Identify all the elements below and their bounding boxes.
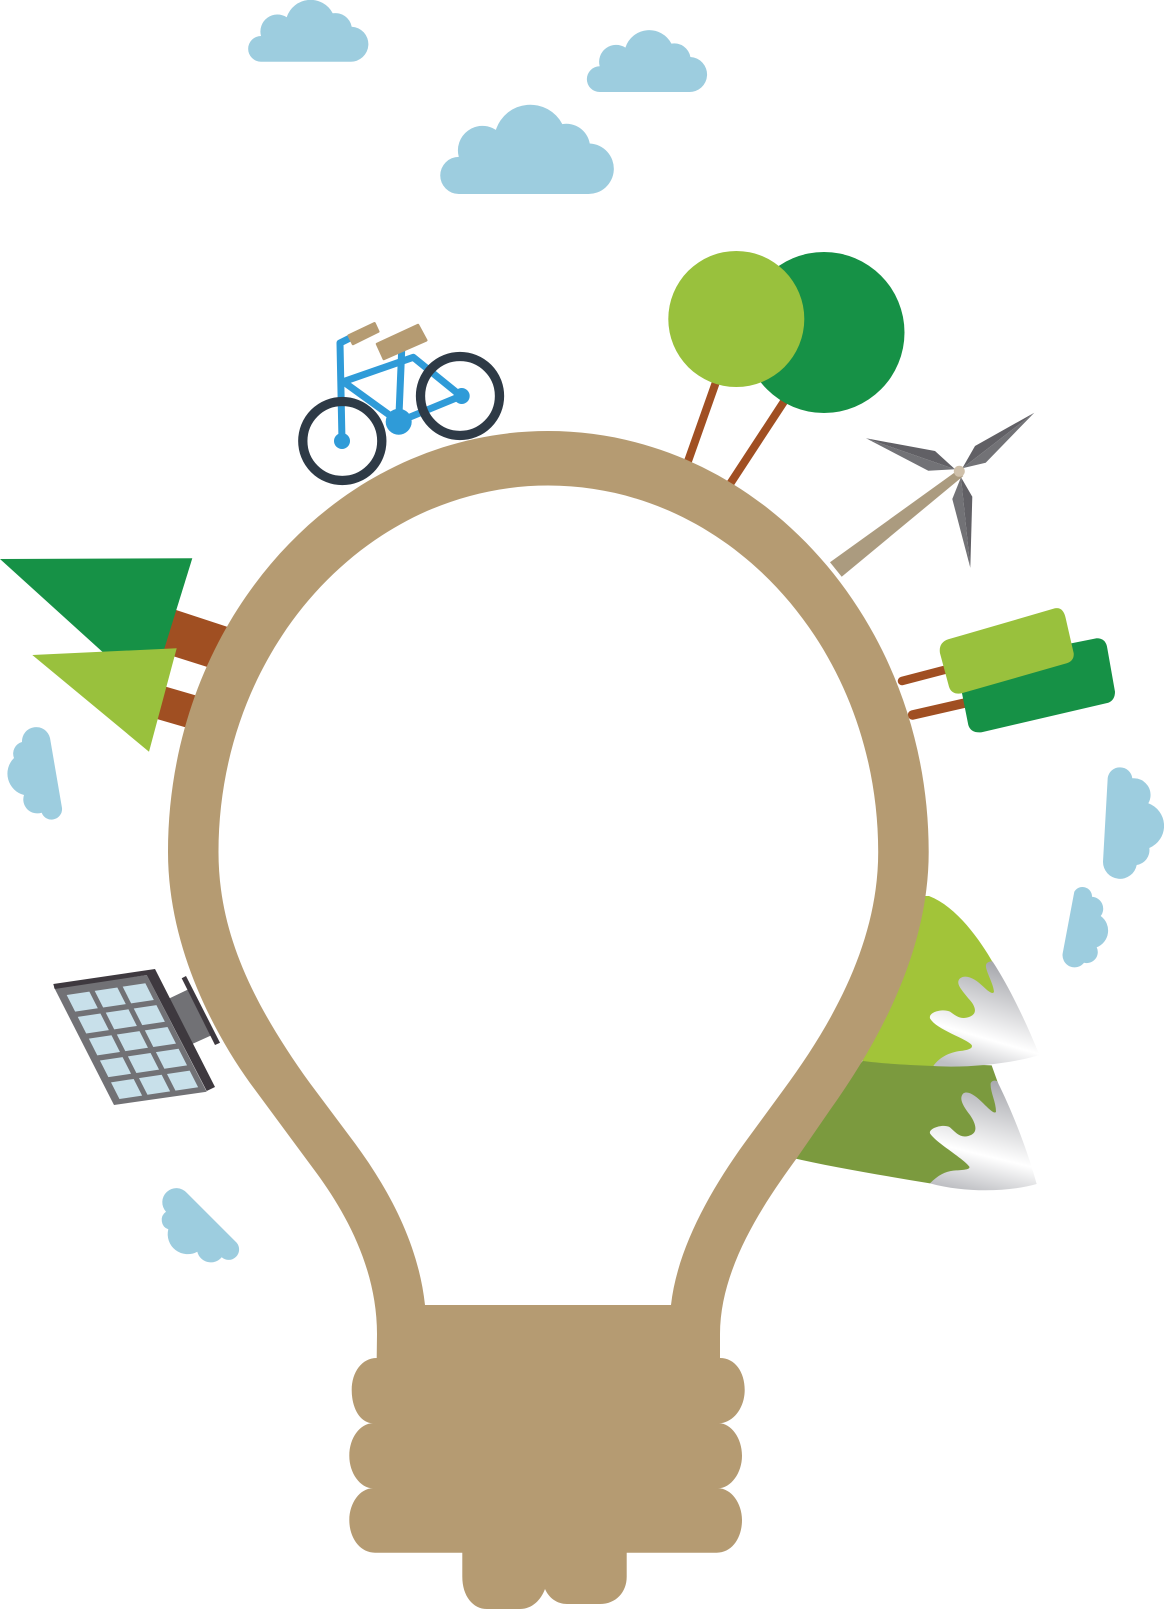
cloud: top left xyxy=(248,0,368,62)
tree pair: left side triangle trees xyxy=(0,558,240,752)
icon: bicycle xyxy=(303,323,500,480)
icon: solar panel xyxy=(53,969,220,1105)
cloud: right side small xyxy=(1063,887,1108,967)
icon: wind turbine xyxy=(830,413,1034,577)
cloud: right side large xyxy=(1103,767,1164,879)
tree pair: top round trees xyxy=(668,251,904,484)
cloud: left side xyxy=(7,727,62,820)
mountains: snowy peaks on the right xyxy=(790,896,1039,1190)
cloud: large centre xyxy=(440,105,614,194)
cloud: top right xyxy=(587,30,707,92)
cloud: lower left xyxy=(162,1188,239,1262)
tree pair: right side rounded trees xyxy=(902,608,1115,732)
light bulb outline and base xyxy=(168,431,929,1609)
